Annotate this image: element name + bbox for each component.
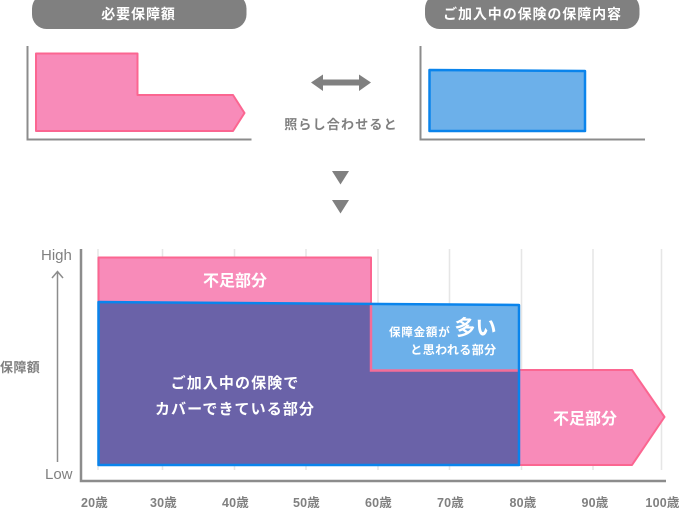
label: lower shortfall: 不足部分 [553, 410, 617, 428]
double-headed arrow [311, 74, 371, 91]
comparison caption: 照らし合わせると [284, 117, 398, 132]
small chart: current coverage [420, 46, 645, 140]
label: surplus part: 保障金額が [389, 327, 450, 339]
label: covered part: ご加入中の保険で [171, 374, 299, 392]
right header pill: ご加入中の保険の保障内容 [443, 6, 622, 22]
label: covered part: カバーできている部分 [155, 401, 315, 418]
blue coverage outline [98, 302, 519, 465]
label: surplus part: 多い [454, 317, 496, 340]
chart axes [81, 249, 666, 481]
y axis scale: High [41, 247, 72, 264]
label: covered part [155, 374, 315, 418]
left header pill: 必要保障額 [101, 6, 176, 22]
x axis age labels [81, 496, 680, 508]
left header pill [32, 0, 246, 29]
main chart [0, 247, 680, 508]
label: upper shortfall: 不足部分 [203, 272, 267, 290]
pink edge of surplus region [371, 304, 519, 370]
right header pill [425, 0, 640, 29]
label: surplus part [389, 317, 496, 357]
pink shortfall shape [98, 258, 664, 465]
light blue surplus region [371, 304, 519, 370]
y axis scale: 保障額 [0, 360, 40, 375]
grid lines [98, 249, 662, 470]
y axis scale [0, 247, 73, 483]
downward triangles [332, 171, 349, 214]
small chart: required coverage [28, 46, 252, 140]
purple covered region [98, 302, 519, 465]
y axis scale: Low [45, 466, 73, 483]
label: surplus part: と思われる部分 [410, 342, 496, 357]
